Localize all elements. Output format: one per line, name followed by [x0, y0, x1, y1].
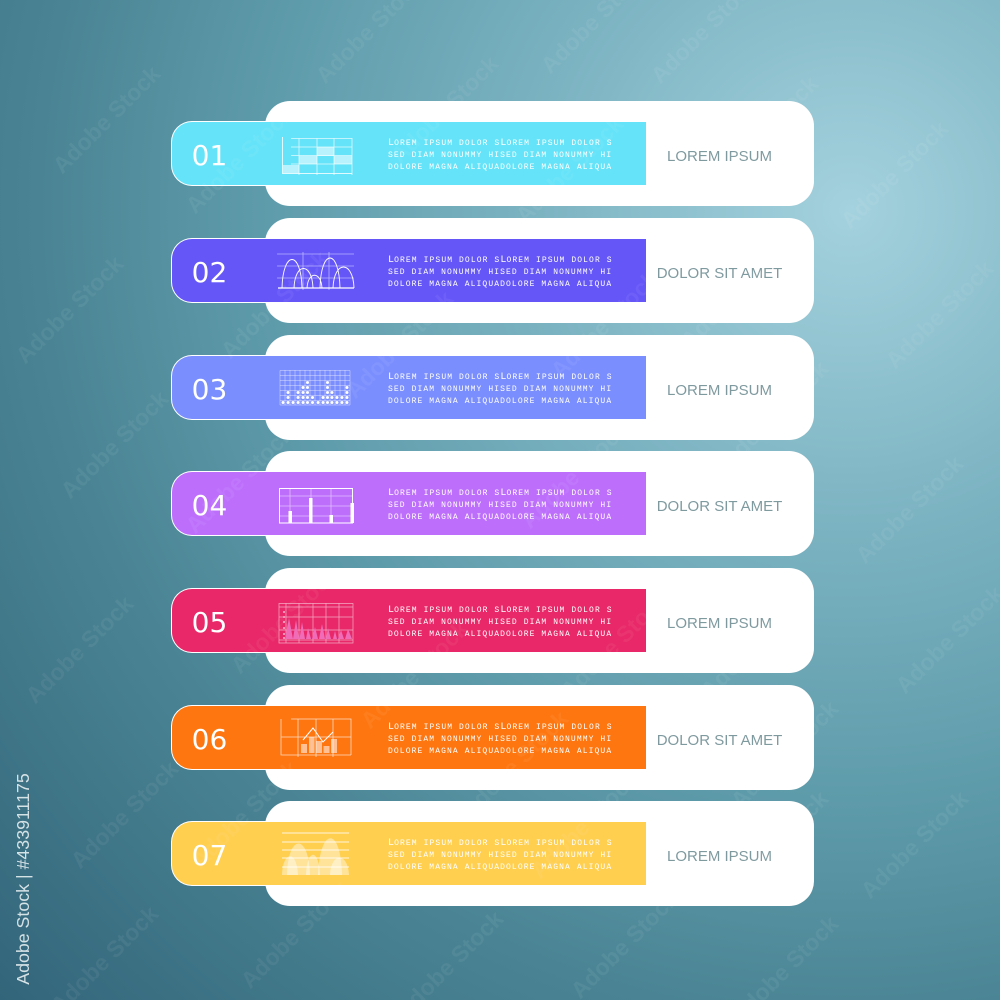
label 02: DOLOR SIT AMET	[657, 265, 782, 282]
text block 01: LOREM IPSUM DOLOR SLOREM IPSUM DOLOR S	[388, 138, 613, 149]
text block 02: DOLORE MAGNA ALIQUADOLORE MAGNA ALIQUA	[388, 280, 612, 289]
row 01	[171, 101, 814, 206]
number 04: 04	[192, 489, 227, 522]
tab: cyan bar 01	[171, 121, 646, 186]
number 07: 07	[192, 839, 227, 872]
text block 06	[388, 722, 613, 756]
text block 07: SED DIAM NONUMMY HISED DIAM NONUMMY HI	[388, 851, 612, 860]
watermark pattern: Adobe Stock	[355, 615, 473, 733]
panel: white card 02	[265, 218, 814, 323]
text block 02: LOREM IPSUM DOLOR SLOREM IPSUM DOLOR S	[388, 255, 613, 266]
tab: purple bar 04	[171, 471, 646, 536]
text block 04: LOREM IPSUM DOLOR SLOREM IPSUM DOLOR S	[388, 488, 613, 499]
text block 03: LOREM IPSUM DOLOR SLOREM IPSUM DOLOR S	[388, 372, 613, 383]
watermark pattern: Adobe Stock	[850, 450, 968, 568]
watermark pattern: Adobe Stock	[455, 705, 573, 823]
text block 02	[388, 255, 613, 289]
tab: violet bar 02	[171, 238, 646, 302]
panel: white card 07	[265, 801, 814, 906]
watermark pattern: Adobe Stock	[510, 110, 628, 228]
icon: bar and line chart	[280, 718, 352, 757]
watermark pattern: Adobe Stock	[675, 235, 793, 353]
text block 05: LOREM IPSUM DOLOR SLOREM IPSUM DOLOR S	[388, 605, 613, 616]
watermark pattern: Adobe Stock	[715, 785, 833, 903]
number 01: 01	[192, 139, 227, 172]
row 04	[171, 451, 814, 556]
icon: dot grid chart	[280, 370, 350, 406]
text block 05	[388, 605, 613, 639]
tab: orange bar 06	[171, 705, 646, 770]
label 07: LOREM IPSUM	[667, 848, 772, 865]
text block 07	[388, 838, 613, 872]
watermark pattern: Adobe Stock	[695, 585, 813, 703]
text block 06: LOREM IPSUM DOLOR SLOREM IPSUM DOLOR S	[388, 722, 613, 733]
icon: spike area chart	[278, 603, 354, 644]
watermark pattern: Adobe Stock	[525, 765, 643, 883]
label 05: LOREM IPSUM	[667, 615, 772, 632]
watermark pattern: Adobe Stock	[340, 285, 458, 403]
stock id caption: Adobe Stock | #433911175	[13, 773, 33, 985]
watermark pattern: Adobe Stock	[705, 70, 823, 188]
number 03: 03	[192, 373, 227, 406]
watermark pattern: Adobe Stock	[545, 265, 663, 383]
watermark pattern: Adobe Stock	[715, 355, 833, 473]
tab: periwinkle bar 03	[171, 355, 646, 420]
panel: white card 05	[265, 568, 814, 673]
text block 05: SED DIAM NONUMMY HISED DIAM NONUMMY HI	[388, 618, 612, 627]
text block 07: DOLORE MAGNA ALIQUADOLORE MAGNA ALIQUA	[388, 863, 612, 872]
row 03	[171, 335, 814, 440]
watermark pattern: Adobe Stock	[225, 560, 343, 678]
text block 03	[388, 372, 613, 406]
label 06: DOLOR SIT AMET	[657, 732, 782, 749]
text block 05: DOLORE MAGNA ALIQUADOLORE MAGNA ALIQUA	[388, 630, 612, 639]
watermark pattern: Adobe Stock	[65, 755, 183, 873]
text block 01: DOLORE MAGNA ALIQUADOLORE MAGNA ALIQUA	[388, 163, 612, 172]
text block 06: SED DIAM NONUMMY HISED DIAM NONUMMY HI	[388, 735, 612, 744]
text block 03: DOLORE MAGNA ALIQUADOLORE MAGNA ALIQUA	[388, 397, 612, 406]
label 01: LOREM IPSUM	[667, 148, 772, 165]
text block 04: SED DIAM NONUMMY HISED DIAM NONUMMY HI	[388, 501, 612, 510]
row 06	[171, 685, 814, 790]
watermark pattern: Adobe Stock	[880, 255, 998, 373]
number 06: 06	[192, 723, 227, 756]
label 03: LOREM IPSUM	[667, 382, 772, 399]
watermark pattern: Adobe Stock	[215, 245, 333, 363]
watermark pattern: Adobe Stock	[235, 875, 353, 993]
watermark pattern: Adobe Stock	[565, 885, 683, 1000]
text block 04: DOLORE MAGNA ALIQUADOLORE MAGNA ALIQUA	[388, 513, 612, 522]
panel: white card 06	[265, 685, 814, 790]
tab: crimson bar 05	[171, 588, 646, 652]
text block 07: LOREM IPSUM DOLOR SLOREM IPSUM DOLOR S	[388, 838, 613, 849]
number 05: 05	[192, 606, 227, 639]
watermark pattern: Adobe Stock	[180, 420, 298, 538]
text block 01: SED DIAM NONUMMY HISED DIAM NONUMMY HI	[388, 151, 612, 160]
tab: yellow bar 07	[171, 821, 646, 886]
icon: stepped grid chart	[282, 137, 352, 175]
watermark pattern: Adobe Stock	[47, 60, 165, 178]
row 07	[171, 801, 814, 906]
icon: arc chart	[277, 252, 354, 290]
watermark pattern: Adobe Stock	[855, 785, 973, 903]
row 05	[171, 568, 814, 673]
watermark pattern: Adobe Stock	[55, 385, 173, 503]
watermark pattern: Adobe Stock	[835, 115, 953, 233]
watermark pattern: Adobe Stock	[185, 755, 303, 873]
panel: white card 03	[265, 335, 814, 440]
number 02: 02	[192, 256, 227, 289]
text block 03: SED DIAM NONUMMY HISED DIAM NONUMMY HI	[388, 385, 612, 394]
text block 04	[388, 488, 613, 522]
watermark pattern: Adobe Stock	[725, 695, 843, 813]
panel: white card 04	[265, 451, 814, 556]
watermark pattern: Adobe Stock	[10, 250, 128, 368]
watermark pattern: Adobe Stock	[180, 100, 298, 218]
panel: white card 01	[265, 101, 814, 206]
watermark pattern: Adobe Stock	[515, 415, 633, 533]
text block 01	[388, 138, 613, 172]
text block 06: DOLORE MAGNA ALIQUADOLORE MAGNA ALIQUA	[388, 747, 612, 756]
icon: hill area chart	[282, 832, 349, 875]
text block 02: SED DIAM NONUMMY HISED DIAM NONUMMY HI	[388, 268, 612, 277]
watermark pattern: Adobe Stock	[20, 590, 138, 708]
label 04: DOLOR SIT AMET	[657, 498, 782, 515]
watermark pattern: Adobe Stock	[555, 585, 673, 703]
icon: slim bar chart	[279, 488, 354, 524]
row 02	[171, 218, 814, 323]
watermark pattern: Adobe Stock	[385, 50, 503, 168]
